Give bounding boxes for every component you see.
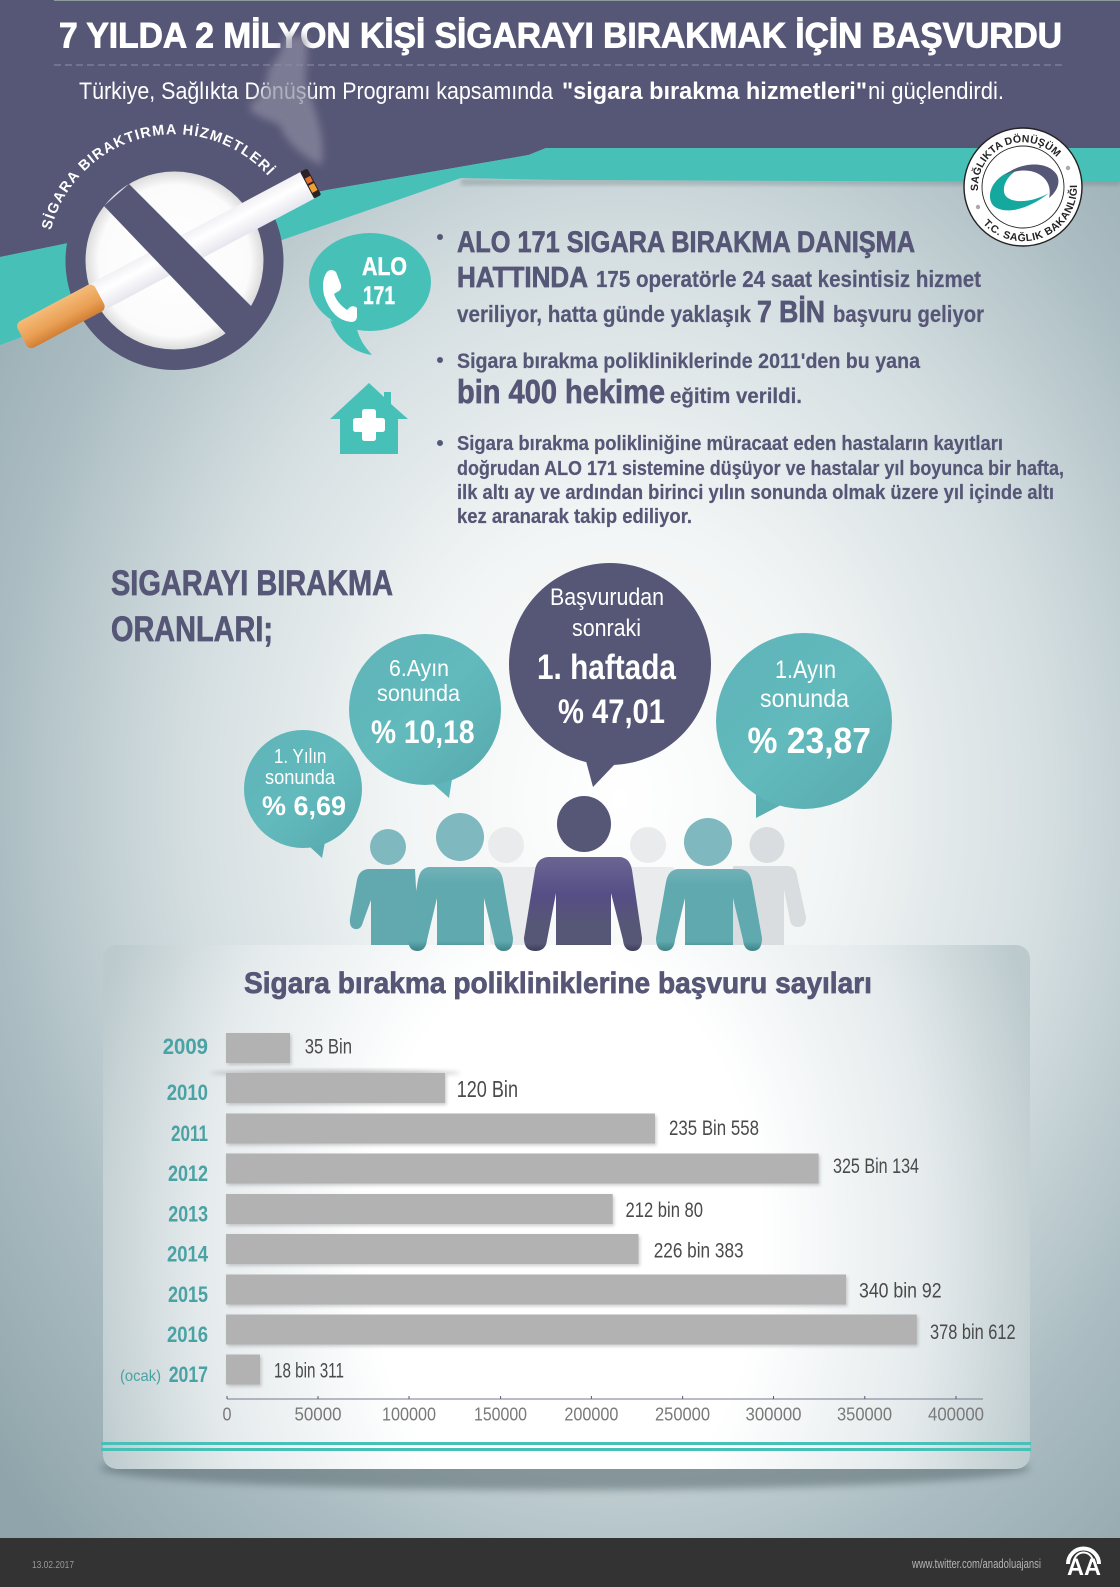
no smoking sign (15, 152, 321, 370)
sign white disc (86, 172, 264, 350)
value labels: 340 bin 92 (859, 1279, 942, 1303)
axis: 300000 (746, 1405, 802, 1425)
bubble: 6. Ayın: % 10,18 (371, 714, 474, 750)
bubble text: ALO (362, 253, 407, 281)
bullet text 1 (437, 226, 984, 329)
bullet text 1: HATTINDA (457, 262, 588, 294)
bullet text 2 (437, 349, 921, 410)
year labels: (ocak) (120, 1368, 161, 1385)
person: teal right (656, 818, 762, 951)
bubble: 1. Yılın: % 6,69 (262, 791, 346, 821)
axis: 200000 (564, 1405, 618, 1425)
sign diagonal bar (104, 184, 257, 340)
year labels: 2011 (171, 1121, 208, 1146)
value labels: 325 Bin 134 (833, 1154, 919, 1178)
cigarette (15, 168, 321, 350)
footer (0, 1538, 1120, 1587)
panel heading: Sigara bırakma polikliniklerine başvuru sayıları (244, 967, 872, 1000)
bubble: 1. Ay: sonunda (760, 685, 849, 713)
icon: speech bubble ALO 171 (309, 233, 431, 355)
value labels: 235 Bin 558 (669, 1116, 759, 1140)
footer: www.twitter.com/anadoluajansi (911, 1557, 1041, 1571)
smoke (249, 36, 323, 165)
bubble: 1. Ay: % 23,87 (748, 720, 871, 761)
year labels: 2015 (168, 1282, 208, 1307)
bubble: 6. Ayın (349, 634, 501, 798)
bubble text (362, 253, 407, 310)
person: teal small (350, 829, 419, 945)
icon: clinic house (330, 383, 408, 454)
axis: 250000 (655, 1405, 710, 1425)
person: purple centre (524, 796, 642, 951)
person: gray background left (488, 827, 542, 945)
axis: 350000 (837, 1405, 892, 1425)
people group (350, 796, 806, 951)
bullet text 3: kez aranarak takip ediliyor. (457, 506, 692, 528)
bullet text 3: doğrudan ALO 171 sistemine düşüyor ve hastalar yıl boyunca bir hafta, (457, 458, 1064, 480)
bullet text 1: veriliyor, hatta günde yaklaşık (457, 301, 751, 327)
bubble: 1. hafta: % 47,01 (558, 693, 665, 731)
bullet text 2: bin 400 hekime (457, 373, 665, 410)
bubble: 1. Yılın: sonunda (265, 767, 336, 789)
axis (222, 1396, 984, 1425)
year labels: 2016 (167, 1322, 208, 1347)
axis: 50000 (294, 1405, 342, 1425)
logo: AA: AA (1067, 1554, 1101, 1581)
bullet text 2: Sigara bırakma polikliniklerinde 2011'den bu yana (457, 349, 921, 373)
section heading (111, 564, 393, 649)
bubble: 6. Ayın: 6.Ayın (389, 655, 449, 681)
subtitle (79, 78, 1004, 105)
subtitle: Türkiye, Sağlıkta Dönüşüm Programı kapsamında (79, 78, 554, 105)
bullet text 3: ilk altı ay ve ardından birinci yılın sonunda olmak üzere yıl içinde altı (457, 482, 1054, 504)
bubble: 1. hafta: sonraki (572, 615, 641, 642)
section heading: ORANLARI; (111, 610, 273, 649)
value labels: 226 bin 383 (654, 1239, 744, 1263)
sign ring (66, 152, 284, 370)
value labels: 120 Bin (457, 1076, 518, 1102)
icon: phone (323, 270, 357, 322)
value labels: 35 Bin (305, 1035, 352, 1059)
bubble: 1. Ay: 1.Ayın (775, 656, 836, 684)
title: 7 YILDA 2 MİLYON KİŞİ SİGARAYI BIRAKMAK İÇİN BAŞVURDU (59, 17, 1062, 56)
bar chart (120, 1033, 1016, 1425)
bubble: 1. Yılın (244, 730, 362, 858)
bubble: 6. Ayın: sonunda (377, 680, 460, 706)
header band (0, 0, 1120, 345)
year labels: 2012 (168, 1161, 208, 1186)
value labels: 18 bin 311 (274, 1358, 344, 1382)
person: gray background right (733, 827, 806, 945)
year labels: 2010 (167, 1080, 208, 1105)
bullet text 1: başvuru geliyor (833, 301, 984, 327)
value labels: 212 bin 80 (626, 1198, 703, 1222)
logo: Sağlıkta Dönüşüm (963, 127, 1083, 247)
year labels: 2014 (167, 1241, 209, 1266)
panel: bar chart (101, 945, 1031, 1469)
logo: Sağlıkta Dönüşüm: SAĞLIKTA DÖNÜŞÜM (970, 134, 1062, 191)
bubble: 1. Ay (716, 633, 892, 818)
year labels: 2013 (168, 1201, 208, 1226)
bubble text: 171 (363, 282, 395, 310)
bubble: 1. Yılın: 1. Yılın (274, 746, 326, 768)
subtitle: ni güçlendirdi. (868, 78, 1004, 105)
section heading: SIGARAYI BIRAKMA (111, 564, 393, 603)
value labels (274, 1035, 1016, 1382)
axis: 0 (222, 1405, 232, 1425)
year labels: 2017 (169, 1362, 208, 1387)
year labels (120, 1034, 209, 1387)
person: teal left (408, 813, 513, 951)
bullet text 3: Sigara bırakma polikliniğine müracaat eden hastaların kayıtları (457, 433, 1003, 455)
bullet text 1: 175 operatörle 24 saat kesintisiz hizmet (596, 266, 981, 292)
bullet text 2: eğitim verildi. (670, 384, 802, 408)
bullet text 1: 7 BİN (757, 294, 825, 329)
panel shadow (100, 1446, 1030, 1490)
bullet text 3 (437, 433, 1064, 528)
bubble: 1. hafta: Başvurudan (550, 584, 664, 611)
bubble: 1. hafta: 1. haftada (537, 648, 676, 687)
footer: 13.02.2017 (32, 1559, 74, 1571)
subtitle: "sigara bırakma hizmetleri" (562, 78, 867, 105)
logo: Sağlıkta Dönüşüm: T.C. SAĞLIK BAKANLIĞI (984, 186, 1077, 242)
year labels: 2009 (163, 1034, 208, 1059)
value labels: 378 bin 612 (930, 1320, 1016, 1344)
axis: 150000 (474, 1405, 527, 1425)
bullet text 1: ALO 171 SIGARA BIRAKMA DANIŞMA (457, 226, 915, 259)
axis: 100000 (382, 1405, 436, 1425)
bubble: 1. hafta (509, 563, 711, 787)
axis: 400000 (928, 1405, 984, 1425)
circular label: SİGARA BIRAKTIRMA HİZMETLERİ (42, 124, 276, 230)
person: gray background middle (625, 827, 675, 945)
